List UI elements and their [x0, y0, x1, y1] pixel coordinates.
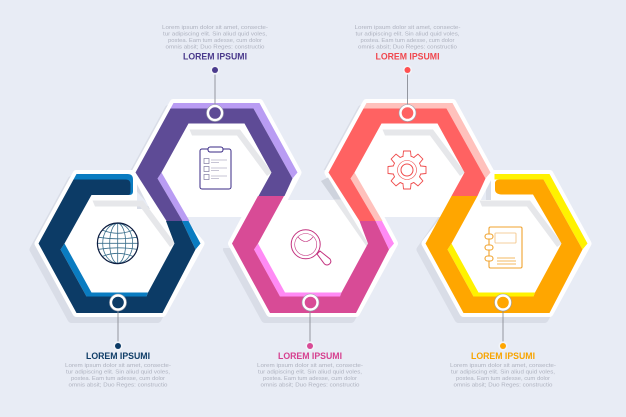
text block: step 5: LOREM IPSUMI	[471, 351, 535, 362]
text block: step 2: tur adipiscing elit. Sin aliud quid voles,	[163, 32, 267, 38]
text block: step 3: postea. Eam tum adesse, cum dolor	[263, 376, 357, 382]
text block: step 1	[65, 351, 171, 388]
panel: hexagon 4 coral	[328, 103, 490, 221]
text block: step 4: tur adipiscing elit. Sin aliud quid voles,	[356, 32, 460, 38]
text block: step 5: Lorem ipsum dolor sit amet, consecte-	[450, 363, 556, 369]
text block: step 2: omnis absit; Duo Reges: constructio	[166, 44, 264, 50]
panel: hexagon 5 orange	[426, 174, 588, 313]
text block: step 5: postea. Eam tum adesse, cum dolor	[456, 376, 550, 382]
marker: step 1	[110, 294, 126, 351]
text block: step 5	[450, 351, 556, 388]
icon: notebook	[485, 227, 522, 268]
icon: gear	[388, 151, 426, 189]
text block: step 4: Lorem ipsum dolor sit amet, consecte-	[354, 25, 461, 31]
text block: step 3: LOREM IPSUMI	[278, 351, 342, 362]
marker: step 2	[206, 65, 224, 122]
text block: step 1: omnis absit; Duo Reges: constructio	[68, 382, 168, 388]
text block: step 2: Lorem ipsum dolor sit amet, consecte-	[162, 25, 268, 31]
icon: clipboard	[200, 147, 231, 189]
panel: hexagon 1 navy	[38, 174, 200, 313]
marker: step 4	[399, 65, 416, 122]
text block: step 4: omnis absit; Duo Reges: constructio	[358, 44, 457, 50]
panel: hexagon 3 pink	[232, 178, 394, 313]
text block: step 3: Lorem ipsum dolor sit amet, consecte-	[257, 363, 363, 369]
icon: globe	[97, 223, 138, 264]
text block: step 1: LOREM IPSUMI	[86, 351, 150, 362]
panel: hexagon 2 purple	[136, 103, 298, 221]
marker: step 3	[302, 294, 319, 351]
text block: step 2: LOREM IPSUMI	[183, 52, 247, 62]
text block: step 1: tur adipiscing elit. Sin aliud quid voles,	[66, 370, 170, 376]
text block: step 3	[257, 351, 363, 388]
text block: step 1: postea. Eam tum adesse, cum dolor	[71, 376, 165, 382]
text block: step 3: tur adipiscing elit. Sin aliud quid voles,	[258, 370, 362, 376]
text block: step 2: postea. Eam tum adesse, cum dolor	[168, 38, 262, 44]
text block: step 5: omnis absit; Duo Reges: constructio	[454, 382, 552, 388]
text block: step 5: tur adipiscing elit. Sin aliud quid voles,	[451, 370, 555, 376]
icon: magnifier	[291, 230, 331, 265]
text block: step 1: Lorem ipsum dolor sit amet, consecte-	[65, 363, 171, 369]
marker: step 5	[494, 294, 512, 351]
text block: step 4: postea. Eam tum adesse, cum dolor	[360, 38, 455, 44]
text block: step 4	[354, 25, 461, 62]
text block: step 4: LOREM IPSUMI	[376, 52, 440, 62]
text block: step 3: omnis absit; Duo Reges: constructio	[260, 382, 360, 388]
text block: step 2	[162, 25, 268, 62]
